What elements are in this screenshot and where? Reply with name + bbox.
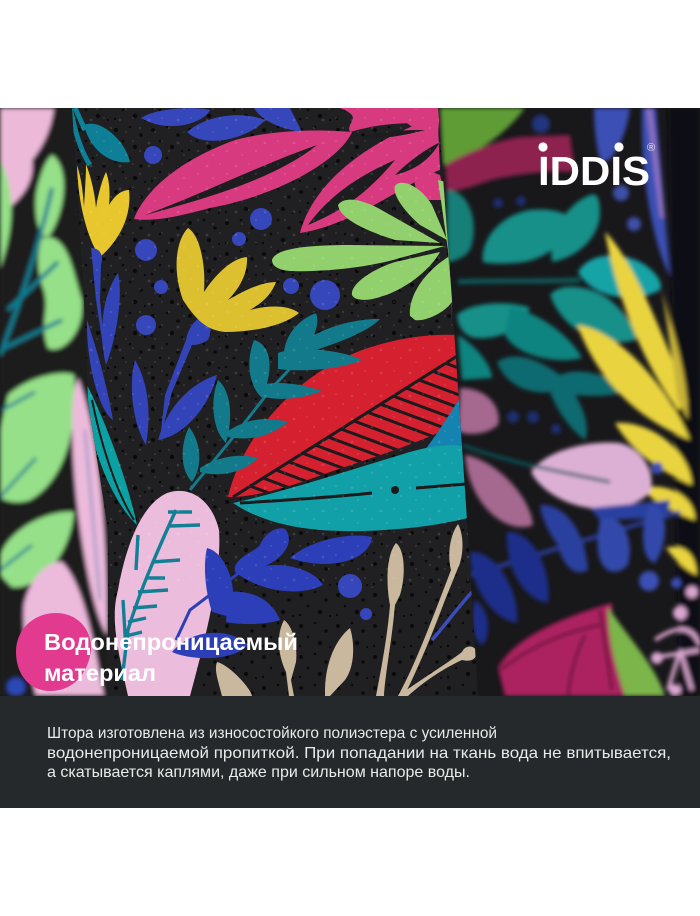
- infographic: [0, 108, 700, 808]
- teal leaf mid-line: [240, 484, 466, 503]
- description line 3: а скатывается каплями, даже при сильном напоре воды.: [47, 764, 470, 781]
- heading line 1: Водонепроницаемый: [44, 629, 298, 655]
- blue stem and leaves under left tulip: [87, 248, 217, 445]
- teal top-left leaf: [84, 124, 130, 162]
- top blue leaves: [135, 108, 372, 620]
- blue tip by fold: [426, 400, 462, 448]
- logo wordmark: IDDIS: [538, 148, 650, 194]
- brand logo: IDDIS: [538, 142, 655, 194]
- blurred right curtain fold: [440, 108, 700, 696]
- description panel: [0, 696, 700, 808]
- red striped leaf: [228, 335, 462, 497]
- yellow tulip left: [77, 164, 129, 257]
- green plant: [272, 180, 453, 320]
- logo dot right: [614, 142, 624, 152]
- black veins in pink leaves: [145, 130, 440, 225]
- pink branching leaves: [134, 108, 446, 233]
- pink accent circle: [16, 613, 91, 691]
- registered mark: ®: [647, 142, 655, 154]
- glints of water on print: [60, 108, 490, 588]
- heading line 2: материал: [44, 660, 156, 686]
- sharp central curtain fold: [72, 108, 476, 696]
- logo dot left: [538, 142, 548, 152]
- yellow flower centre: [177, 228, 299, 332]
- water droplets on dark fabric: [60, 108, 490, 696]
- blurred left curtain fold: [0, 108, 110, 696]
- teal leaf vein: [92, 400, 134, 520]
- description line 2: водонепроницаемой пропиткой. При попадании на ткань вода не впитывается,: [47, 745, 671, 762]
- blue stem crossing beige sprig: [432, 592, 472, 640]
- description line 1: Штора изготовлена из износостойкого полиэстера с усиленной: [47, 725, 497, 742]
- fern on lilac leaf: [122, 510, 200, 680]
- leaf stripes: [232, 355, 460, 497]
- photo backdrop: [0, 108, 700, 696]
- teal fern: [183, 313, 380, 490]
- teal leaf dot: [391, 486, 399, 494]
- teal top-left stem: [70, 108, 90, 165]
- central fabric base: [60, 108, 490, 696]
- heading: [44, 629, 298, 686]
- blue fern bottom: [172, 528, 372, 658]
- teal leaf under the red leaf: [233, 445, 468, 531]
- photo: shower curtain with floral print: [0, 108, 700, 696]
- teal narrow leaf: [87, 385, 137, 525]
- lilac leaf with fern: [115, 491, 219, 696]
- beige sprigs: [216, 524, 476, 696]
- description text: [47, 725, 671, 781]
